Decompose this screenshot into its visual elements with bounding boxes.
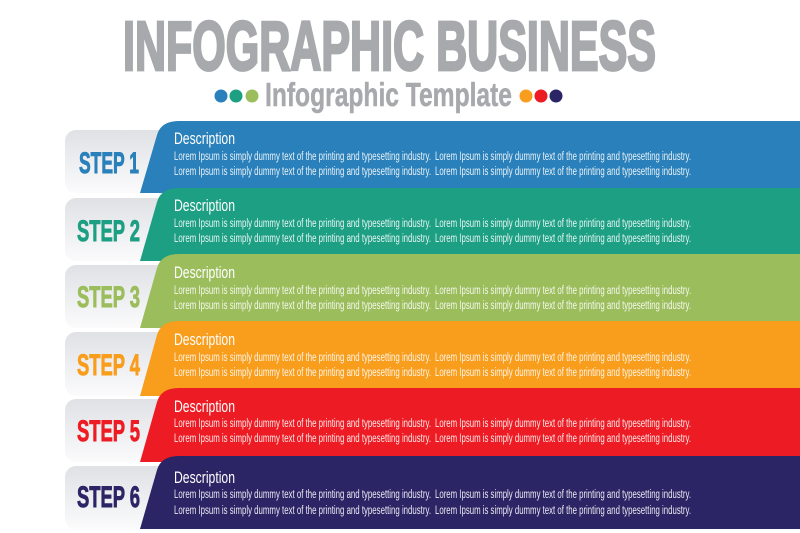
band 6: Lorem Ipsum is simply dummy text of the printing and typesetting industry. [174,489,431,501]
subtitle row [214,76,562,113]
step 2 tab: STEP 2 [77,215,140,248]
band 2: Description [174,196,235,215]
band 3 [140,254,800,328]
step 6 tab [65,466,175,529]
step 5 tab: STEP 5 [77,415,140,448]
band 1: Lorem Ipsum is simply dummy text of the printing and typesetting industry. [174,166,431,178]
band 1: Lorem Ipsum is simply dummy text of the printing and typesetting industry. [174,151,431,163]
band 6 [140,456,800,529]
band 5: Description [174,397,235,416]
band 1: Description [174,129,235,148]
right dots [520,90,562,102]
band 4 [140,321,800,396]
step 6 tab: STEP 6 [77,481,140,514]
band 6: Lorem Ipsum is simply dummy text of the printing and typesetting industry. [174,505,431,517]
band 4: Description [174,330,235,349]
band 1 [140,121,800,193]
step 5 tab [65,399,175,462]
subtitle: Infographic Template [265,76,512,113]
step 1 tab [65,130,175,193]
band 5: Lorem Ipsum is simply dummy text of the printing and typesetting industry. [174,433,431,445]
band 3: Lorem Ipsum is simply dummy text of the printing and typesetting industry. [174,285,431,297]
left dots [214,90,258,102]
step 3 tab: STEP 3 [77,281,140,314]
step 4 tab [65,332,175,396]
step 3 tab [65,265,175,328]
step 1 tab: STEP 1 [79,147,139,180]
band 4: Lorem Ipsum is simply dummy text of the printing and typesetting industry. [174,352,431,364]
step 2 tab [65,198,175,261]
step 4 tab: STEP 4 [77,349,140,382]
band 5 [140,388,800,462]
band 2: Lorem Ipsum is simply dummy text of the printing and typesetting industry. [174,218,431,230]
band 2: Lorem Ipsum is simply dummy text of the printing and typesetting industry. [174,233,431,245]
band 2 [140,188,800,261]
band 6: Description [174,468,235,487]
band 4: Lorem Ipsum is simply dummy text of the printing and typesetting industry. [174,367,431,379]
band 3: Lorem Ipsum is simply dummy text of the printing and typesetting industry. [174,300,431,312]
band 5: Lorem Ipsum is simply dummy text of the printing and typesetting industry. [174,418,431,430]
band 3: Description [174,263,235,282]
